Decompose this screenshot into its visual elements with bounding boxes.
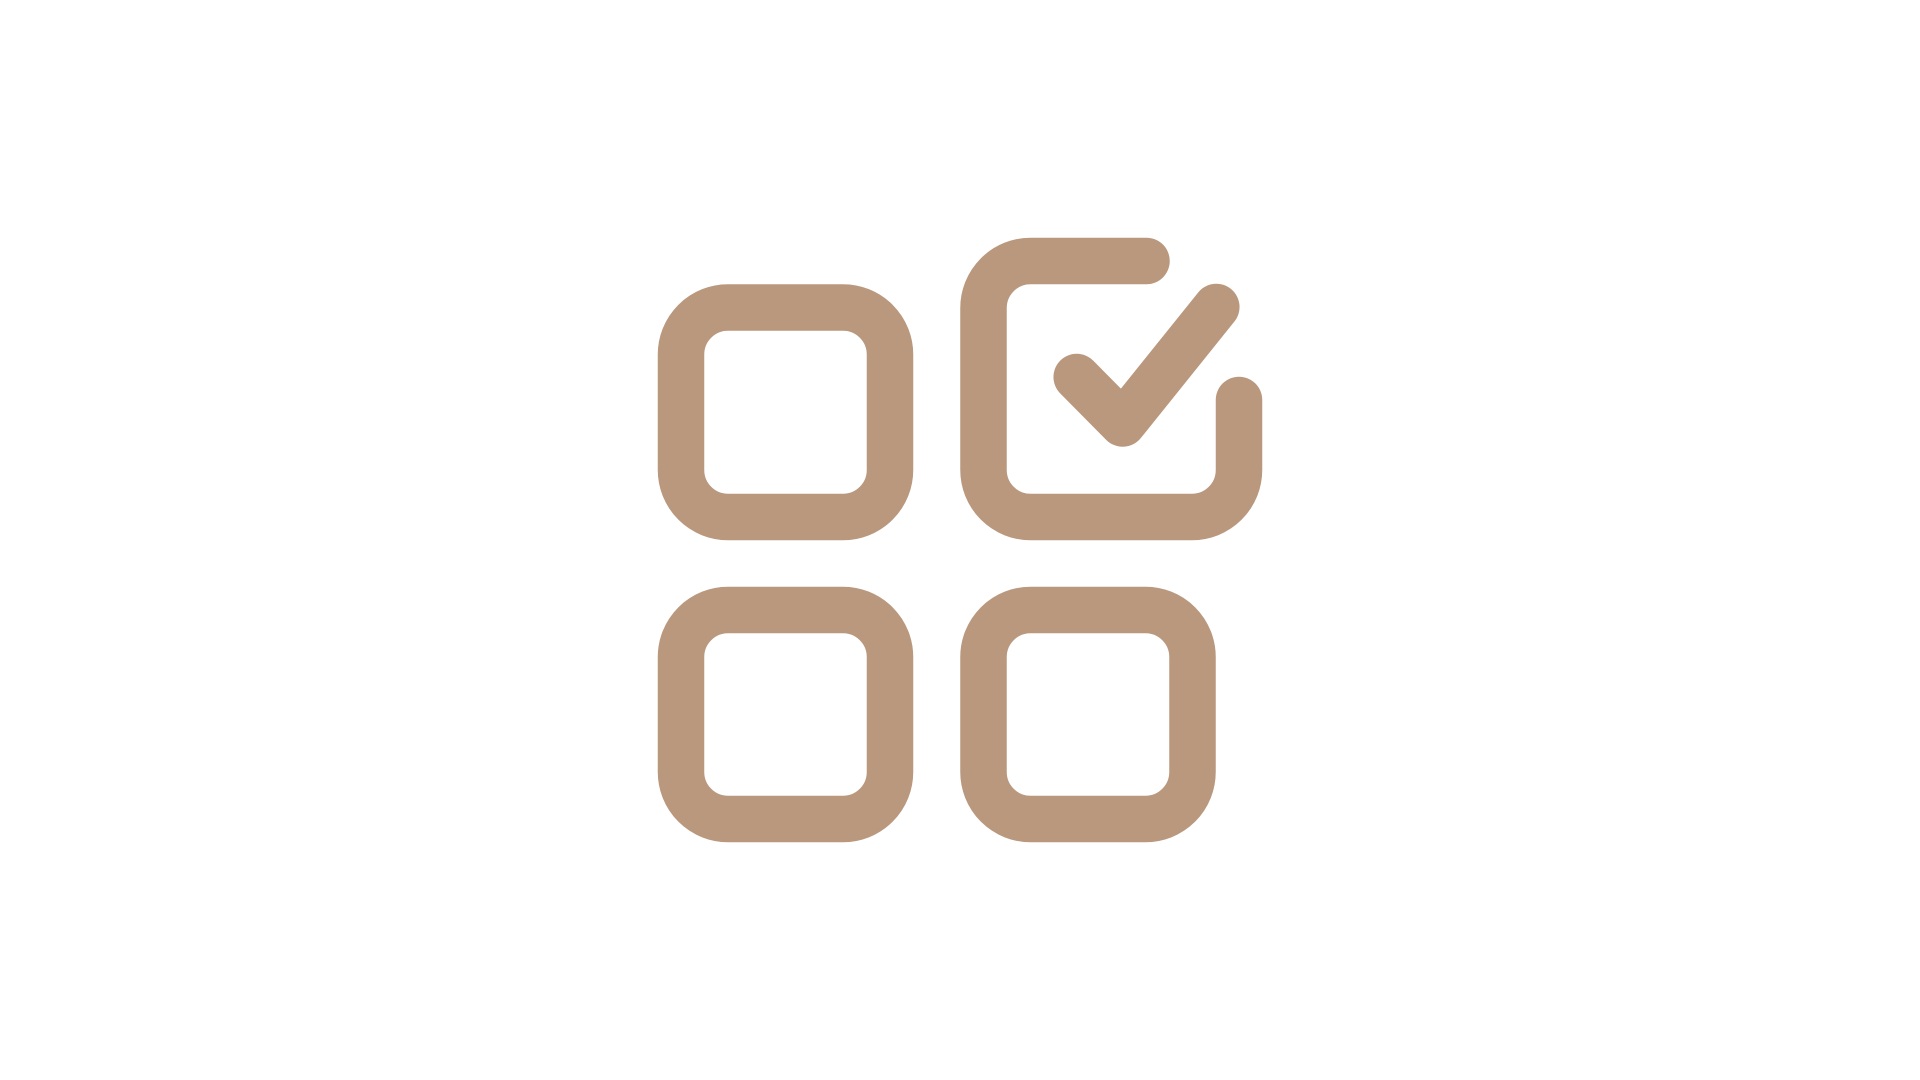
icon: bottom-left rounded square: [681, 610, 890, 819]
icon: bottom-right rounded square: [984, 610, 1192, 819]
icon: top-left rounded square: [681, 308, 890, 517]
icon: checklist grid: [681, 261, 1239, 819]
icon: top-right open square: [984, 261, 1239, 517]
icon: check mark: [1077, 307, 1216, 424]
